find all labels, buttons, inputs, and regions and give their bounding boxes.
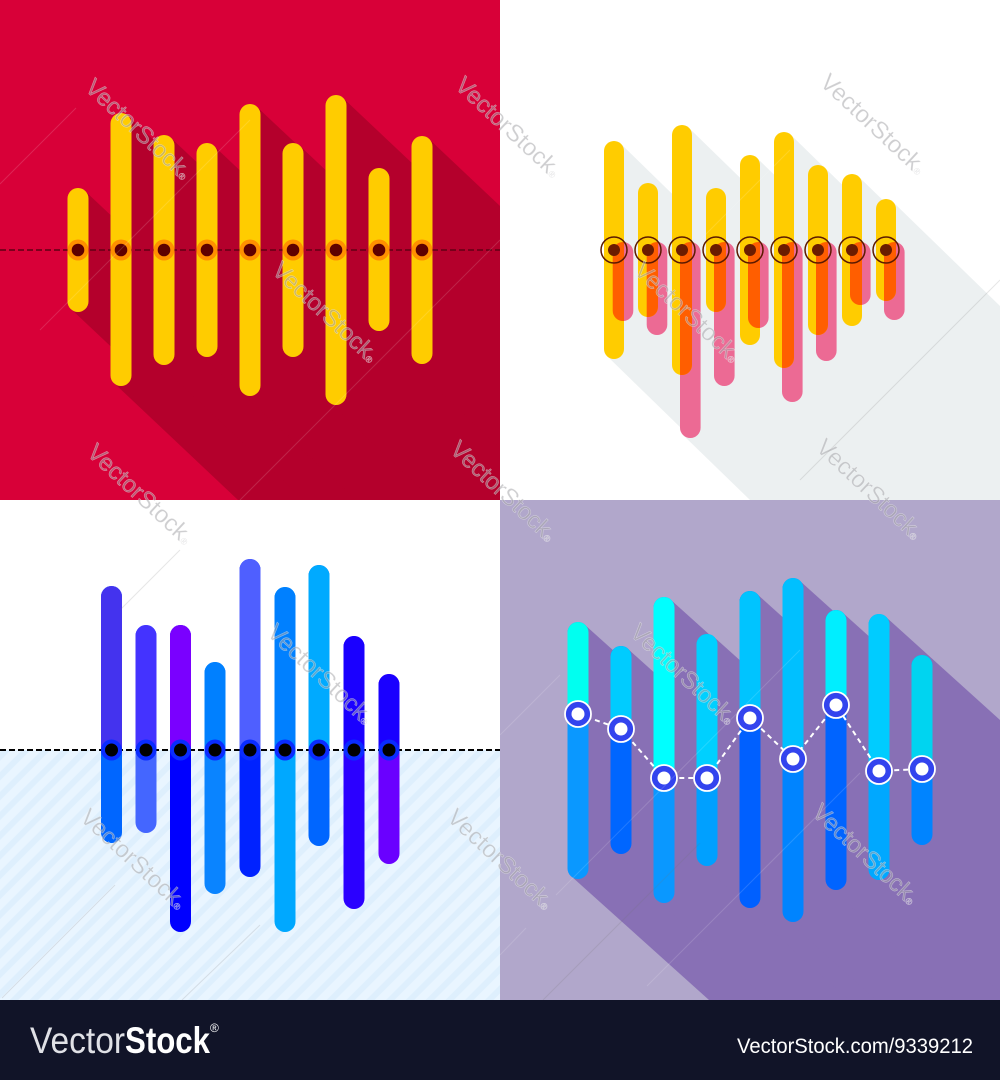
panel: white chart with yellow and pink bars [500,0,1000,500]
watermarks [75,69,932,916]
watermarks: VectorStock® [445,436,562,548]
footer bar [0,1000,1000,1080]
footer image id: VectorStock.com/9339212 [737,1035,973,1058]
marker halos: blue panel [101,740,400,760]
watermarks: VectorStock® [82,439,199,551]
watermarks: VectorStock® [262,619,379,731]
bars: upper cyan segments [568,578,932,778]
orange overlap of pink and yellow bars [612,242,896,375]
faint grey diagonal lines on light panels [2,280,1000,1000]
yellow bars [604,125,896,375]
watermarks: VectorStock® [267,257,384,369]
footer background [0,1000,1000,1080]
panel background: white [500,0,1000,500]
panel background: white upper half [0,500,500,750]
panel background: red [0,0,500,500]
yellow bars [68,95,432,405]
panel: purple chart with cyan and blue bars [500,500,1000,1000]
bars: lower coloured segments [101,559,400,932]
watermarks: VectorStock® [629,257,746,369]
footer logo: VectorStock [30,1020,226,1061]
panel: split white and pale blue chart with blue bars [0,500,500,1000]
dashed connecting line [578,705,922,778]
marker halos: red panel [68,240,432,260]
watermarks: VectorStock® [80,74,197,186]
dashed baseline: blue panel [0,749,500,751]
panel background: lilac [500,500,1000,1000]
marker rings [601,237,899,263]
watermarks: VectorStock® [450,72,567,184]
panel background: striped lower half [0,750,500,1000]
long shadow: red panel [71,98,500,500]
marker dots [608,244,892,256]
faint diagonal watermark lines [0,108,860,986]
watermarks: VectorStock® [75,804,192,916]
watermarks: VectorStock® [811,434,928,546]
pink bars [613,242,905,438]
marker dots: blue panel [105,744,396,756]
watermarks: VectorStock® [807,799,924,911]
data marker centres [572,698,928,784]
footer logo: ® [210,1021,219,1035]
bars: lower blue segments [568,578,932,922]
long shadow: white panel [607,128,1000,500]
dashed baseline: red panel [0,249,500,251]
bars: upper coloured segments [101,559,400,750]
long shadow: purple panel [571,581,1000,1000]
watermarks: VectorStock® [442,804,559,916]
watermarks: VectorStock® [815,69,932,181]
watermarks: VectorStock® [625,619,742,731]
marker dots: red panel [72,244,428,256]
data markers: white ring with blue fill [565,692,935,791]
panel: red chart with yellow bars [0,0,500,500]
